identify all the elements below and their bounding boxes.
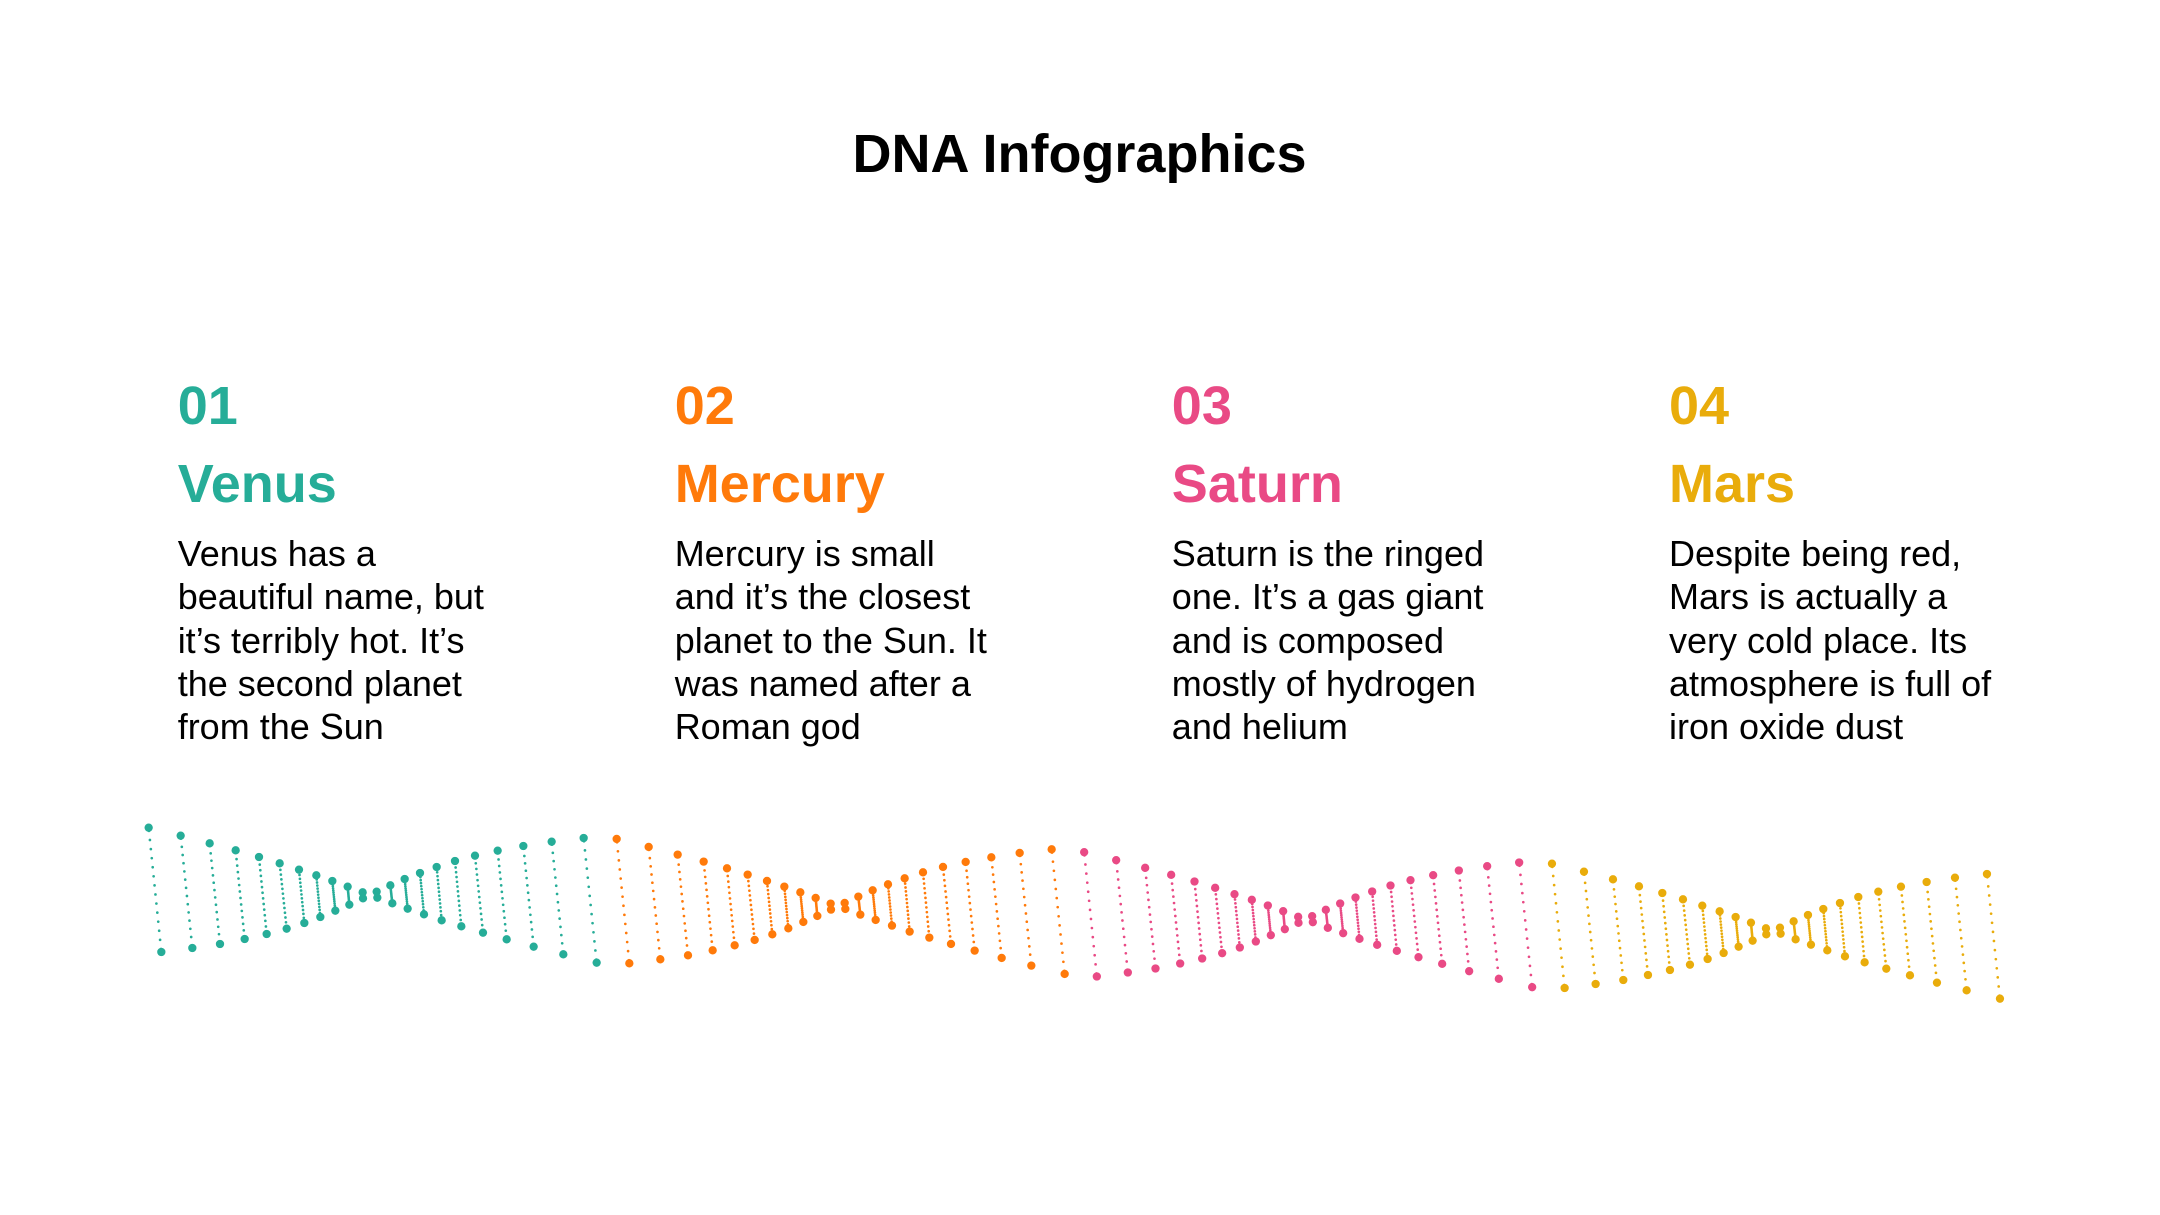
- heading: Saturn: Saturn: [1172, 454, 1343, 514]
- heading: Venus: Venus: [178, 454, 337, 514]
- text: Mars description: Mars is actually a: [1669, 576, 1947, 617]
- number 01: 01: [178, 376, 238, 436]
- text: Mercury description: Roman god: [675, 706, 861, 747]
- text: Mars description: iron oxide dust: [1669, 706, 1903, 747]
- text: Mars description: very cold place. Its: [1669, 620, 1967, 661]
- dotted rungs: [1084, 852, 1532, 987]
- text: Mercury description: was named after a: [675, 663, 971, 704]
- text: Saturn description: one. It’s a gas giant: [1172, 576, 1483, 617]
- helix segment: Saturn pink: [1084, 852, 1532, 987]
- dotted rungs: [1552, 864, 2000, 999]
- panel: 02 Mercury: [674, 376, 987, 747]
- helix segment: Venus teal: [149, 828, 597, 963]
- text: Venus description: it’s terribly hot. It’s: [178, 620, 464, 661]
- end nodes: [149, 828, 597, 963]
- text: Mercury description: planet to the Sun. It: [675, 620, 987, 661]
- heading: Mars: Mars: [1669, 454, 1795, 514]
- title: DNA Infographics: [852, 124, 1307, 184]
- heading: Mercury: Mercury: [675, 454, 885, 514]
- dotted rungs: [617, 839, 1065, 974]
- text: Mercury description: and it’s the closest: [675, 576, 970, 617]
- text: Saturn description: Saturn is the ringed: [1172, 533, 1484, 574]
- text: Venus description: the second planet: [178, 663, 462, 704]
- text: Mars description: atmosphere is full of: [1669, 663, 1991, 704]
- panel: 01 Venus: [178, 376, 484, 747]
- number 03: 03: [1172, 376, 1232, 436]
- text: Venus description: beautiful name, but: [178, 576, 484, 617]
- end nodes: [1552, 864, 2000, 999]
- text: Venus description: from the Sun: [178, 706, 384, 747]
- text: Saturn description: and is composed: [1172, 620, 1444, 661]
- text: Mars description: Despite being red,: [1669, 533, 1961, 574]
- text: Venus description: Venus has a: [178, 533, 376, 574]
- dotted rungs: [149, 828, 597, 963]
- text: Mercury description: Mercury is small: [675, 533, 935, 574]
- end nodes: [617, 839, 1065, 974]
- panel: 03 Saturn: [1172, 376, 1484, 747]
- helix segment: Mercury orange: [617, 839, 1065, 974]
- end nodes: [1084, 852, 1532, 987]
- text: Venus description: [178, 533, 484, 747]
- text: Saturn description: mostly of hydrogen: [1172, 663, 1476, 704]
- text: Mercury description: [674, 533, 987, 747]
- panel: 04 Mars: [1669, 376, 1992, 747]
- text: Saturn description: and helium: [1172, 706, 1348, 747]
- text: Saturn description: [1172, 533, 1484, 747]
- number 04: 04: [1669, 376, 1729, 436]
- text: Mars description: [1669, 533, 1992, 747]
- helix segment: Mars yellow: [1552, 864, 2000, 999]
- number 02: 02: [675, 376, 735, 436]
